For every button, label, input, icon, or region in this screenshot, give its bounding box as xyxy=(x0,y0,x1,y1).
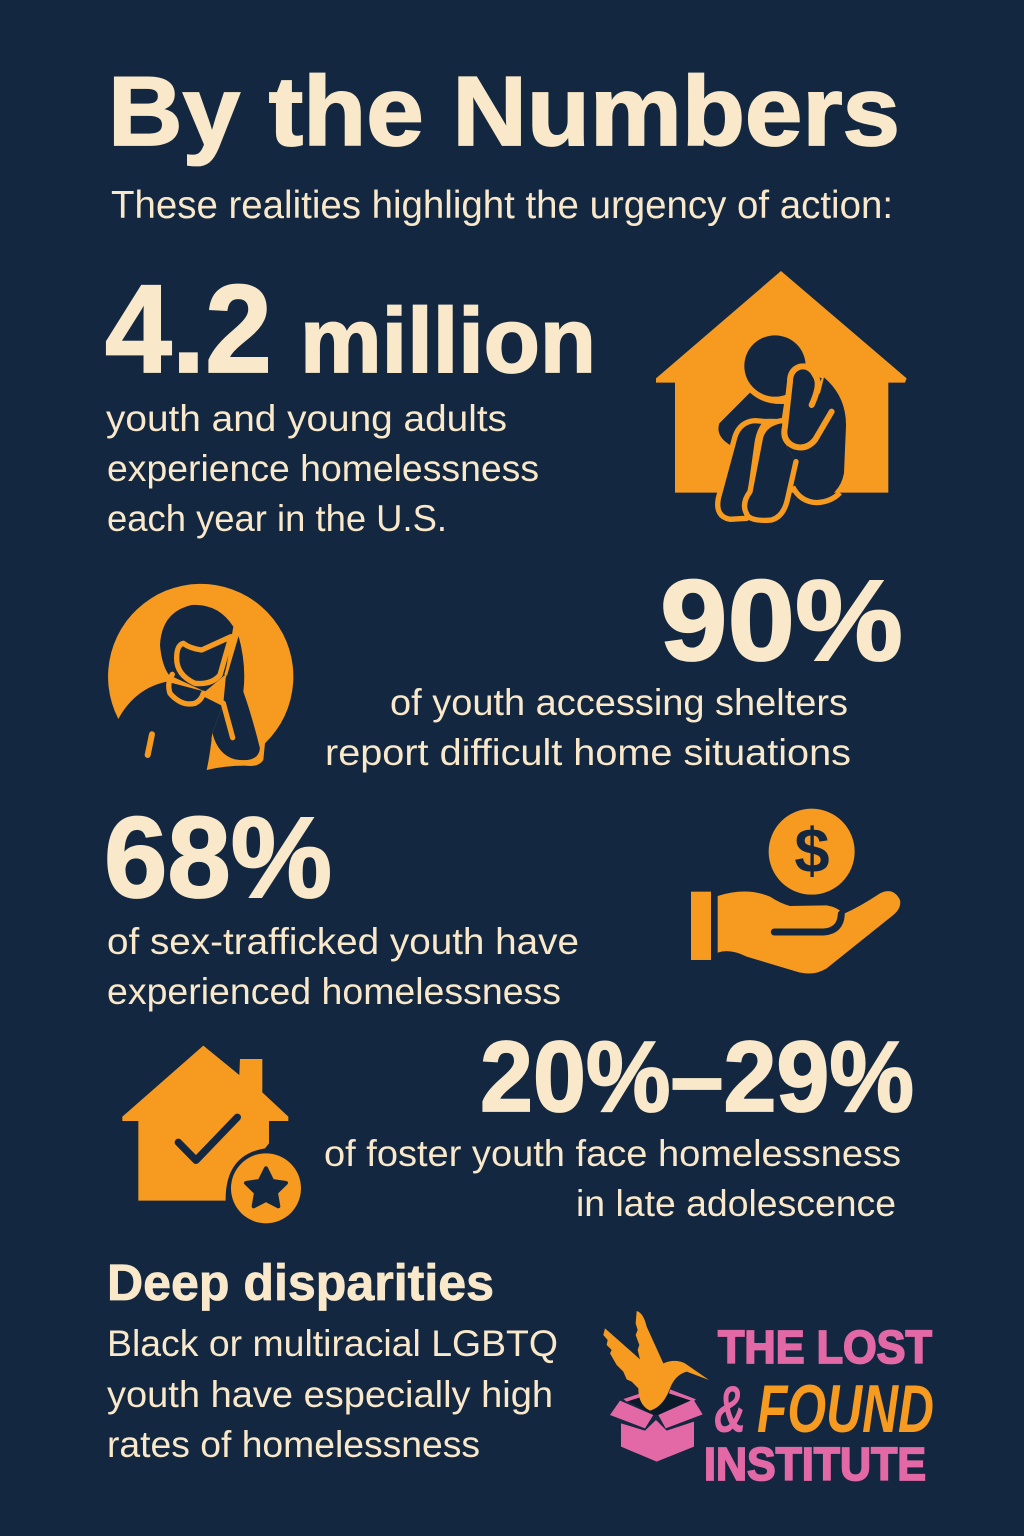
wordmark line 2: FOUND xyxy=(757,1371,934,1447)
wordmark line 1: THE LOST xyxy=(718,1321,932,1373)
description: of youth accessing shelters xyxy=(390,682,848,723)
unit: million: million xyxy=(300,290,596,392)
description: experience homelessness xyxy=(107,448,539,489)
heading: Deep disparities xyxy=(107,1254,494,1311)
description: of foster youth face homelessness xyxy=(324,1133,901,1174)
description xyxy=(324,1133,901,1224)
description: report difficult home situations xyxy=(325,732,851,773)
number: 20%–29% xyxy=(480,1021,914,1133)
text block: rates of homelessness xyxy=(107,1424,480,1465)
subtitle: These realities highlight the urgency of action: xyxy=(111,184,893,227)
number: 4.2: 4.2 xyxy=(105,260,272,399)
ampersand: & xyxy=(714,1372,746,1446)
description: of sex-trafficked youth have xyxy=(107,921,579,962)
number: 90% xyxy=(660,557,903,685)
icon: woman holding her head in circle xyxy=(108,584,293,782)
stat: 20%-29% xyxy=(324,1021,914,1224)
title: By the Numbers xyxy=(108,56,900,166)
stat: 68% xyxy=(104,794,579,1012)
icon: hand receiving dollar coin xyxy=(691,809,900,974)
icon: person huddled inside house xyxy=(656,271,907,521)
icon: hand receiving dollar coin: $ xyxy=(794,816,830,886)
description xyxy=(325,682,851,773)
description: experienced homelessness xyxy=(107,971,561,1012)
description: in late adolescence xyxy=(576,1183,896,1224)
text block: youth have especially high xyxy=(107,1374,553,1415)
text block xyxy=(107,1323,558,1465)
wordmark line 3: INSTITUTE xyxy=(704,1438,926,1490)
description xyxy=(106,398,539,539)
description xyxy=(107,921,579,1012)
icon: house with check mark and star badge xyxy=(122,1046,301,1223)
panel: deep disparities xyxy=(107,1254,558,1465)
stat: 90% xyxy=(325,557,903,773)
icon: hummingbird rising from box xyxy=(603,1311,709,1462)
description: youth and young adults xyxy=(106,398,507,439)
number: 68% xyxy=(104,794,332,922)
description: each year in the U.S. xyxy=(107,498,447,539)
text block: Black or multiracial LGBTQ xyxy=(107,1323,558,1364)
stat: 4.2 million xyxy=(105,260,596,539)
logo: The Lost & Found Institute xyxy=(603,1311,934,1490)
